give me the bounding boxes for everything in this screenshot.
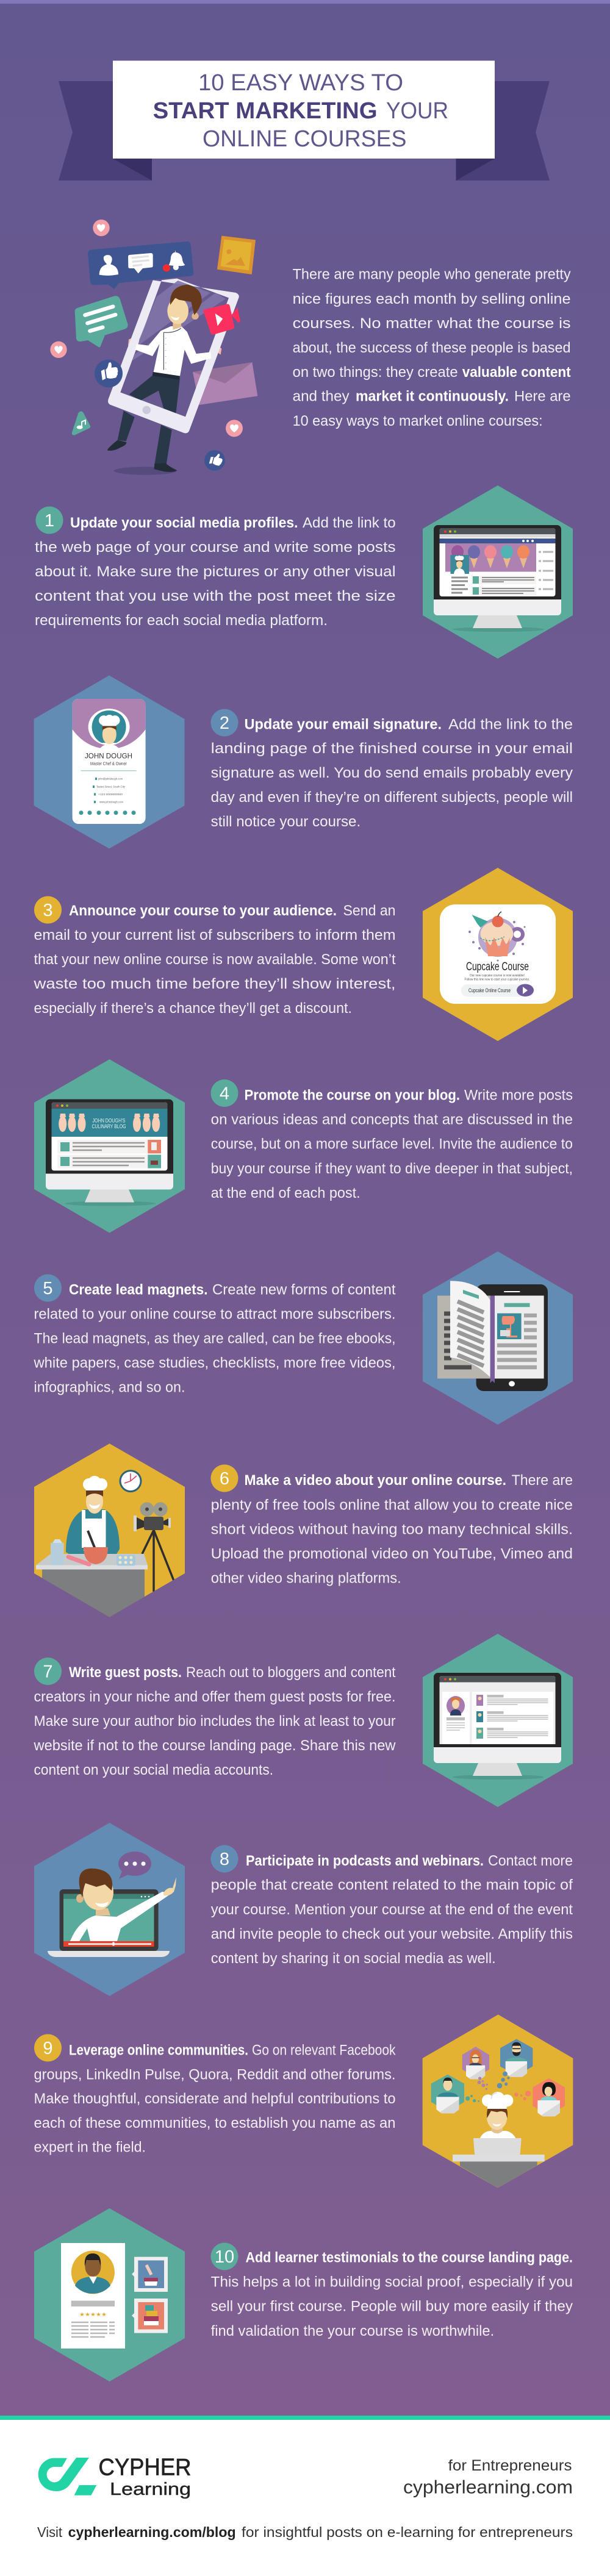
step 7 panel <box>34 1634 573 1807</box>
step 6 text: Make a video about your online course. <box>244 1472 506 1489</box>
hexagon illustration: webinar presenter on laptop <box>34 1823 185 1996</box>
step 9 text: Go on relevant Facebook <box>252 2042 396 2059</box>
step 10 text: Add learner testimonials to the course landing page. <box>245 2249 573 2266</box>
icon: envelope <box>193 362 257 405</box>
step 7 text: Reach out to bloggers and content <box>186 1664 396 1681</box>
icon: music note triangle <box>72 411 90 435</box>
step 4 text: on various ideas and concepts that are discussed in the <box>211 1112 573 1128</box>
step 2 text: day and even if they’re on different subjects, people will <box>211 789 573 806</box>
hexagon illustration: monitor with social profile <box>423 485 573 659</box>
footer blog link: Visit <box>37 2524 63 2540</box>
step 7 text: website if not to the course landing page. Share this new <box>34 1737 396 1754</box>
hexagon illustration: email signature card <box>34 676 184 849</box>
step 6 text: plenty of free tools online that allow you to create nice <box>211 1497 573 1514</box>
step 1 text: requirements for each social media platform. <box>35 612 328 629</box>
number badge 3 <box>34 896 62 923</box>
step 3 text: Announce your course to your audience. <box>69 903 337 919</box>
step 7 text: Make sure your author bio includes the link at least to your <box>34 1713 395 1730</box>
community member: purple hexagon <box>462 2047 489 2079</box>
ribbon left <box>59 81 152 181</box>
community member: coral hexagon <box>533 2078 565 2116</box>
step 5 text: The lead magnets, as they are called, can be free ebooks, <box>34 1330 395 1347</box>
step 1 text: content that you use with the post meet the size <box>35 588 396 604</box>
step 9 panel <box>34 2014 573 2188</box>
step 6 text: short videos without having too many technical skills. <box>211 1521 573 1538</box>
step 2 text: Update your email signature. <box>244 716 442 732</box>
step 5 text: Create new forms of content <box>212 1281 396 1298</box>
logo wordmark: CYPHER <box>99 2454 192 2481</box>
hexagon illustration: email signature card: Tastes Street, South City <box>96 785 126 789</box>
icon: film camera on tripod <box>134 1502 174 1592</box>
title: YOUR <box>386 98 448 124</box>
number badge 8 <box>211 1845 238 1872</box>
number badge 6: 6 <box>220 1469 229 1489</box>
number badge 7 <box>34 1658 62 1685</box>
step 2 panel <box>34 676 573 849</box>
hexagon illustration: learner testimonial cards: ★★★★★ <box>79 2311 107 2317</box>
step 8 text: your course. Mention your course at the end of the event <box>211 1902 573 1918</box>
chef figure <box>66 1476 120 1561</box>
step 5 text: Create lead magnets. <box>69 1281 207 1298</box>
number badge 6 <box>211 1465 238 1492</box>
number badge 10 <box>211 2243 238 2270</box>
title banner <box>59 61 550 181</box>
hexagon illustration: cupcake course email card: Cupcake Course <box>466 961 529 973</box>
step 9 text: expert in the field. <box>34 2139 146 2156</box>
footer tagline: for Entrepreneurs <box>448 2457 572 2474</box>
step 6 text <box>211 1472 573 1587</box>
intro text: on two things: they create <box>293 364 458 381</box>
number badge 8: 8 <box>220 1850 229 1869</box>
step 2 text: still notice your course. <box>211 814 361 830</box>
icon: video camera <box>203 304 240 335</box>
step 4 text: Write more posts <box>464 1087 573 1104</box>
step 3 panel <box>33 868 573 1041</box>
hexagon illustration: email signature card: john@johndough.com <box>98 777 123 781</box>
step 3 text: that your new online course is now available. Some won’t <box>34 951 396 968</box>
hexagon illustration: email signature card: Master Chef & Owner <box>90 761 127 767</box>
step 4 text <box>211 1087 573 1201</box>
step 10 text: This helps a lot in building social proof, especially if you <box>211 2274 573 2291</box>
step 4 text: at the end of each post. <box>211 1185 361 1201</box>
step 3 text: especially if there’s a chance they’ll get a discount. <box>34 1000 352 1017</box>
number badge 1 <box>35 506 63 534</box>
step 2 text: signature as well. You do send emails probably every <box>211 765 573 781</box>
hexagon illustration: monitor with guest author page <box>423 1634 573 1807</box>
number badge 1: 1 <box>45 511 54 531</box>
step 3 text: Send an <box>343 903 395 919</box>
step 8 text: and invite people to check out your website. Amplify this <box>211 1926 573 1942</box>
logo wordmark: Learning <box>110 2480 191 2499</box>
community member: blue hexagon <box>500 2039 533 2077</box>
step 8 text: Contact more <box>488 1853 573 1869</box>
step 1 text: about it. Make sure the pictures or any other visual <box>35 564 396 580</box>
title: START MARKETING <box>153 98 378 124</box>
step 9 text <box>34 2042 396 2156</box>
icon: wall clock <box>120 1470 142 1492</box>
step 7 text <box>34 1664 396 1778</box>
number badge 2: 2 <box>220 714 229 733</box>
step 7 text: creators in your niche and offer them guest posts for free. <box>34 1689 395 1705</box>
step 2 text <box>211 716 573 830</box>
hexagon illustration: learner testimonial cards <box>34 2208 185 2381</box>
step 9 text: Make thoughtful, considerate and helpful contributions to <box>34 2091 395 2107</box>
number badge 4 <box>211 1079 238 1107</box>
step 5 panel <box>34 1251 573 1425</box>
step 6 panel <box>34 1444 573 1622</box>
title: 10 EASY WAYS TO <box>198 70 403 96</box>
step 7 text: content on your social media accounts. <box>34 1762 273 1778</box>
number badge 7: 7 <box>43 1662 53 1682</box>
ribbon right <box>456 81 550 181</box>
intro text: There are many people who generate pretty <box>293 267 571 283</box>
step 8 text: people that create content related to the main topic of <box>211 1877 573 1894</box>
step 7 text: Write guest posts. <box>69 1664 182 1681</box>
kitchen counter <box>36 1539 148 1622</box>
hexagon illustration: ebook on phone <box>423 1251 573 1425</box>
intro text: courses. No matter what the course is <box>293 315 571 332</box>
intro text: 10 easy ways to market online courses: <box>293 413 543 429</box>
icon: picture frame <box>217 236 256 274</box>
footer tagline: cypherlearning.com <box>403 2476 573 2498</box>
number badge 5 <box>34 1275 62 1301</box>
icon: lower heart badge <box>226 420 243 437</box>
step 6 text: Upload the promotional video on YouTube, Vimeo and <box>211 1545 573 1562</box>
step 4 text: buy your course if they want to dive deeper in that subject, <box>211 1161 573 1177</box>
chef torso and head <box>135 285 211 380</box>
step 3 text: waste too much time before they’ll show interest, <box>33 976 396 992</box>
step 9 text: each of these communities, to establish you name as an <box>34 2115 395 2131</box>
step 1 text: Add the link to <box>303 515 396 531</box>
presenter figure <box>70 1869 176 1941</box>
hexagon illustration: cupcake course email card: Cupcake Online Course <box>468 987 511 993</box>
blog title: JOHN DOUGH’S <box>93 1117 126 1124</box>
hexagon illustration: email signature card: www.johndough.com <box>99 800 123 804</box>
step 1 text <box>35 515 396 629</box>
number badge 9 <box>34 2034 62 2061</box>
step 5 text: infographics, and so on. <box>34 1379 185 1395</box>
chef legs behind tablet <box>107 337 221 472</box>
step 9 text: Leverage online communities. <box>69 2042 248 2059</box>
logo: Cypher Learning <box>38 2454 191 2499</box>
intro text: market it continuously. <box>356 388 509 405</box>
intro text: and they <box>293 388 350 405</box>
intro text: nice figures each month by selling online <box>293 291 571 307</box>
connection dots <box>465 2072 531 2102</box>
step 9 text: groups, LinkedIn Pulse, Quora, Reddit and other forums. <box>34 2067 395 2083</box>
number badge 2 <box>211 709 238 737</box>
notification panel <box>88 242 193 289</box>
icon: heart badge top <box>93 220 110 236</box>
step 8 text: content by sharing it on social media as well. <box>211 1950 496 1967</box>
hexagon illustration: cupcake course email card: Our new cupcake course is now available! <box>470 974 525 978</box>
number badge 4: 4 <box>220 1084 229 1104</box>
step 2 text: landing page of the finished course in your email <box>211 740 573 757</box>
step 10 text: sell your first course. People will buy more easily if they <box>211 2299 573 2315</box>
step 10 text: find validation the your course is worthwhile. <box>211 2323 494 2339</box>
number badge 9: 9 <box>43 2039 53 2058</box>
number badge 10: 10 <box>215 2247 234 2267</box>
community member: teal hexagon <box>431 2075 464 2113</box>
logo wordmark <box>99 2454 192 2499</box>
step 6 text: other video sharing platforms. <box>211 1570 401 1587</box>
logo mark <box>38 2458 96 2496</box>
tablet frame <box>108 279 239 433</box>
number badge 3: 3 <box>43 901 53 920</box>
step 8 panel <box>34 1823 573 1996</box>
step 1 panel <box>35 485 573 659</box>
hexagon illustration: cupcake course email card: Follow this link now to start your cupcake journey. <box>465 978 529 982</box>
step 10 panel <box>34 2208 573 2381</box>
footer blog link: cypherlearning.com/blog <box>68 2524 236 2540</box>
number badge 5: 5 <box>43 1279 53 1298</box>
step 5 text <box>34 1281 396 1395</box>
icon: thumbs up badge <box>95 359 123 387</box>
step 4 text: Promote the course on your blog. <box>244 1087 460 1104</box>
signature name: JOHN DOUGH <box>85 751 132 760</box>
step 10 text <box>211 2249 573 2339</box>
title: ONLINE COURSES <box>203 126 406 152</box>
step 4 panel <box>34 1059 573 1233</box>
icon: cupcake <box>468 912 526 961</box>
step 3 text: email to your current list of subscribers to inform them <box>34 927 395 943</box>
intro text: about, the success of these people is based <box>293 340 571 356</box>
step 4 text: course, but on a more surface level. Invite the audience to <box>211 1136 573 1153</box>
icon: left heart badge <box>50 342 67 358</box>
footer tagline <box>403 2457 573 2498</box>
chef at laptop <box>473 2092 522 2155</box>
step 3 text <box>33 903 396 1017</box>
step 8 text <box>211 1853 573 1967</box>
footer blog link: for insightful posts on e-learning for entrepreneurs <box>242 2524 573 2540</box>
footer band <box>0 2416 610 2420</box>
hero illustration: chef in tablet with social icons <box>50 220 257 475</box>
hexagon illustration: chef connected to online community <box>423 2014 573 2188</box>
hexagon illustration: monitor with culinary blog <box>34 1059 185 1233</box>
intro text: valuable content <box>462 364 571 381</box>
intro text <box>293 267 571 429</box>
icon: green speech bubble <box>75 296 128 347</box>
step 2 text: Add the link to the <box>448 716 573 732</box>
hexagon illustration: cupcake course email card <box>423 868 573 1041</box>
hexagon illustration: email signature card: +123 0000000000 <box>98 793 123 796</box>
step 6 text: There are <box>512 1472 573 1489</box>
step 1 text: the web page of your course and write some posts <box>35 539 396 556</box>
step 1 text: Update your social media profiles. <box>70 515 298 531</box>
step 5 text: related to your online course to attract more subscribers. <box>34 1306 395 1322</box>
icon: lower thumbs badge <box>204 450 225 471</box>
step 8 text: Participate in podcasts and webinars. <box>246 1853 484 1869</box>
icon: speech bubble with dots <box>118 1852 151 1879</box>
title <box>153 70 448 152</box>
intro text: Here are <box>514 388 571 405</box>
hexagon illustration: chef filming a cooking video <box>34 1444 185 1622</box>
footer blog link <box>37 2524 573 2540</box>
step 5 text: white papers, case studies, checklists, more free videos, <box>34 1354 396 1371</box>
hexagon illustration: monitor with culinary blog: CULINARY BLOG <box>92 1123 126 1130</box>
